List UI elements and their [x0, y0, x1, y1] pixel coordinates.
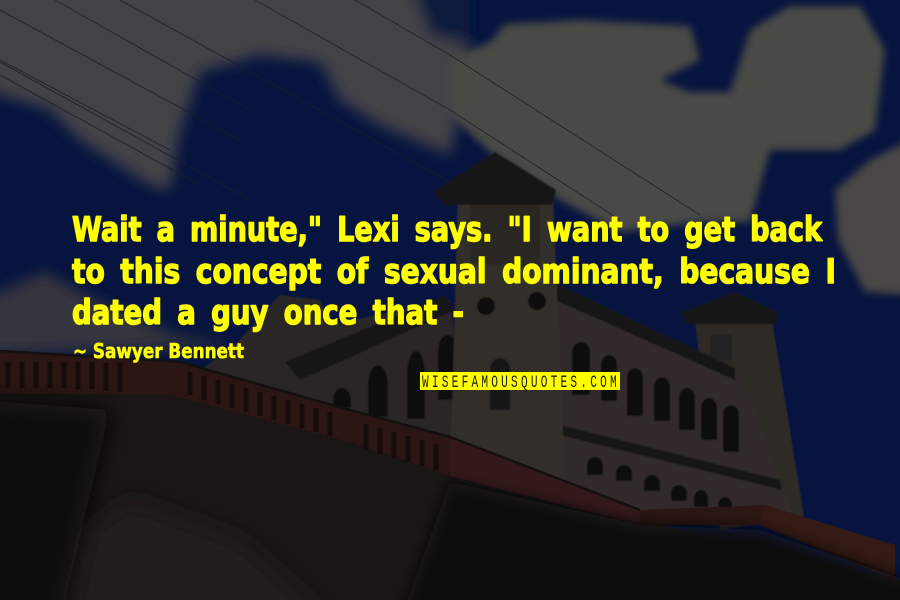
clouds	[0, 0, 900, 355]
railing wall	[0, 351, 895, 580]
stone retaining wall	[0, 390, 900, 600]
quote text	[72, 210, 836, 333]
building: right tower	[680, 292, 804, 530]
watermark badge: WISEFAMOUSQUOTES.COM	[422, 374, 617, 393]
building: main tower	[433, 152, 566, 500]
building: left wing	[180, 295, 470, 470]
building: main facade	[555, 283, 795, 525]
quote text: dated a guy once that -	[72, 293, 464, 333]
ground and foliage	[0, 400, 900, 600]
power lines	[0, 0, 700, 220]
attribution: ~ Sawyer Bennett	[73, 339, 244, 363]
